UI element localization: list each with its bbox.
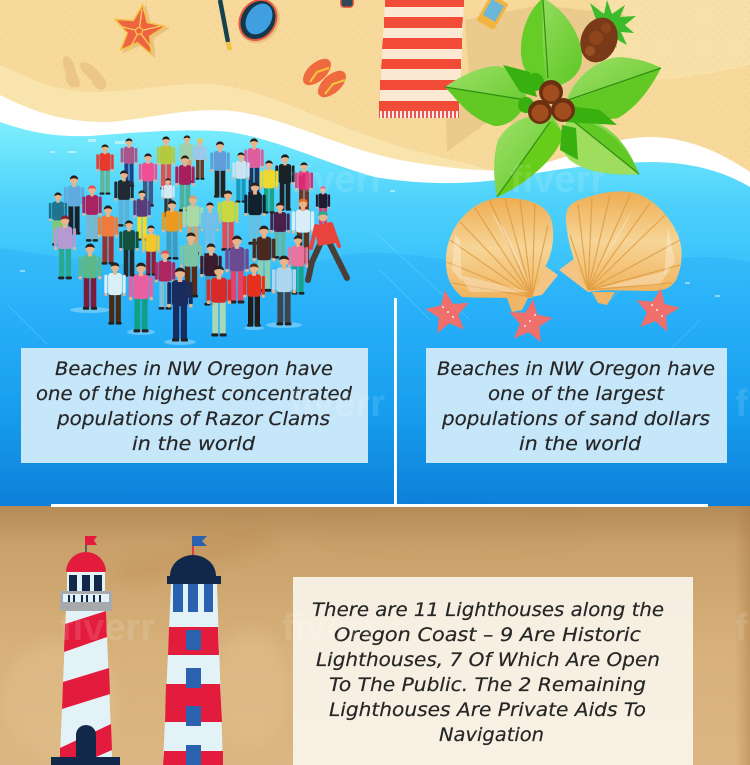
watermarks: fiverr xyxy=(290,159,385,201)
watermarks: fiverr xyxy=(510,159,605,201)
text box: lighthouses: Oregon Coast – 9 Are Historic xyxy=(334,624,642,646)
watermarks: fiverr xyxy=(282,607,377,649)
icon: red lighthouse xyxy=(51,536,120,765)
text box: sand dollars: Beaches in NW Oregon have xyxy=(437,358,715,380)
text box: lighthouses: There are 11 Lighthouses along the xyxy=(312,599,664,621)
icon: striped towel xyxy=(379,0,464,118)
horizontal divider xyxy=(51,504,708,507)
icon: footprints xyxy=(63,56,106,90)
icon: right scallop shell xyxy=(559,191,682,305)
text box: sand dollars: one of the largest xyxy=(488,383,666,405)
text box: lighthouses: Lighthouses, 7 Of Which Are Open xyxy=(316,649,660,671)
text box: sand dollars xyxy=(426,348,727,463)
icon: starfish xyxy=(109,0,173,60)
icon: flip flops xyxy=(298,54,351,102)
text box: lighthouses: Lighthouses Are Private Aids To xyxy=(329,699,646,721)
watermarks: fiverr xyxy=(60,607,155,649)
text box: razor clams: one of the highest concentrated xyxy=(36,383,353,405)
icon: small black object xyxy=(341,0,353,7)
text box: sand dollars: populations of sand dollars xyxy=(441,408,710,430)
ocean water xyxy=(0,95,750,510)
illustration: crowd of people xyxy=(49,135,347,345)
text box: razor clams xyxy=(21,348,368,463)
icon: blue lighthouse xyxy=(163,536,223,765)
text box: lighthouses: To The Public. The 2 Remaining xyxy=(329,674,646,696)
text box: razor clams: Beaches in NW Oregon have xyxy=(55,358,333,380)
parchment panel background xyxy=(0,506,750,765)
icon: phone card xyxy=(476,0,509,30)
text box: lighthouses: Navigation xyxy=(439,724,544,746)
text box: razor clams: populations of Razor Clams xyxy=(56,408,330,430)
watermarks: fiverr xyxy=(290,383,385,425)
vertical divider xyxy=(394,298,397,504)
sand background xyxy=(0,0,750,200)
watermarks xyxy=(60,159,750,649)
icon: pineapple xyxy=(574,0,636,68)
text box: sand dollars: in the world xyxy=(519,433,642,455)
text box: lighthouses xyxy=(293,577,693,765)
icon: palm leaves with coconuts xyxy=(445,0,661,197)
palm shadow on sand xyxy=(446,5,625,152)
text box: razor clams: in the world xyxy=(132,433,256,455)
icon: left scallop shell xyxy=(446,198,558,312)
icon: coral starfish row xyxy=(423,285,683,343)
icon: snorkel and mask xyxy=(220,0,288,51)
